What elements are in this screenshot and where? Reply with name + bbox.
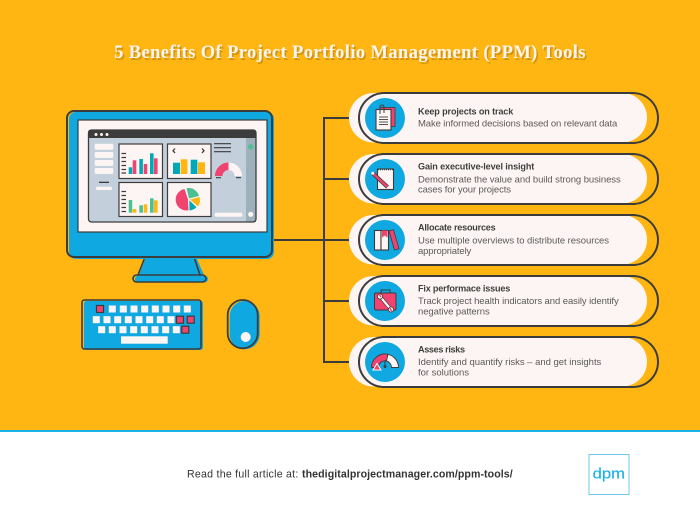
panel: fix performace issues: negative patterns	[418, 307, 490, 318]
bar chart 2	[168, 144, 211, 178]
keyboard	[82, 300, 203, 350]
panel: keep projects on track: Make informed decisions based on relevant data	[418, 118, 618, 129]
panel: gain executive-level insight	[349, 154, 658, 204]
illustration: desktop monitor	[67, 111, 274, 282]
panel: allocate resources: Use multiple overviews to distribute resources	[418, 235, 609, 246]
software window	[88, 130, 256, 222]
gauge and lines	[214, 144, 242, 217]
panel: asses risks: Asses risks	[418, 345, 465, 355]
screen	[78, 120, 267, 232]
icon: notepad and pencil	[371, 169, 394, 190]
logo: dpm	[589, 454, 629, 494]
panel: fix performace issues: Track project health indicators and easily identify	[418, 296, 619, 307]
panel: asses risks: Identify and quantify risks – and get insights	[418, 357, 602, 368]
panel: allocate resources: Allocate resources	[418, 223, 496, 233]
panel: allocate resources	[349, 215, 658, 265]
connector lines	[272, 118, 359, 362]
icon: risk gauge	[371, 354, 399, 370]
panel: asses risks: for solutions	[418, 368, 469, 379]
sidebar menu	[95, 144, 113, 190]
panel: gain executive-level insight: Demonstrate the value and build strong business	[418, 174, 621, 185]
bar chart 3	[119, 182, 162, 216]
icon: books	[374, 230, 399, 250]
title: 5 Benefits Of Project Portfolio Management (PPM) Tools	[114, 43, 586, 63]
panel: keep projects on track: Keep projects on track	[418, 106, 514, 116]
panel: gain executive-level insight: Gain executive-level insight	[418, 162, 534, 172]
footer text: thedigitalprojectmanager.com/ppm-tools/	[302, 468, 513, 480]
panel: fix performace issues: Fix performace issues	[418, 284, 510, 294]
pie chart	[168, 182, 211, 216]
logo: dpm: dpm	[593, 466, 625, 482]
panel: keep projects on track	[349, 93, 658, 143]
icon: toolbox and wrench	[374, 290, 396, 312]
monitor body	[67, 111, 274, 259]
panel: allocate resources: appropriately	[418, 246, 472, 257]
footer text: Read the full article at:	[187, 468, 298, 480]
panel: asses risks	[349, 337, 658, 387]
icon: clipboard	[376, 105, 395, 130]
panel: fix performace issues	[349, 276, 658, 326]
bar chart 1	[119, 144, 162, 178]
stand	[133, 257, 208, 282]
panel: gain executive-level insight: cases for your projects	[418, 185, 511, 196]
mouse	[228, 300, 260, 349]
